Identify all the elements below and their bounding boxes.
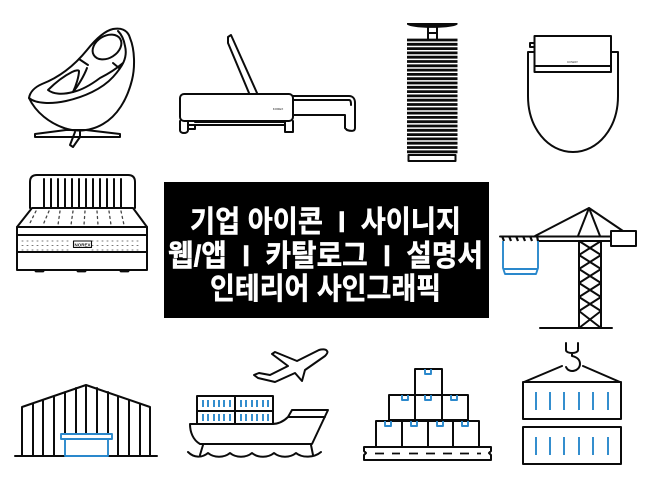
icon: cargo ship	[188, 396, 328, 457]
icon: shipping containers on hook	[523, 343, 621, 464]
icon: lounge bed	[180, 35, 355, 133]
icon: egg chair	[29, 29, 134, 147]
cargo load in blue	[503, 241, 538, 274]
heading line 3: 인테리어 사인그래픽	[210, 273, 441, 306]
container stripes in blue	[203, 400, 268, 421]
warehouse door in blue	[61, 434, 112, 456]
text: brand label on bed: KOREX	[273, 107, 283, 111]
container stripes in blue	[536, 392, 608, 455]
box tags in blue	[385, 369, 468, 426]
text: brand label on mattress: NOREX	[74, 242, 91, 247]
stitching on mattress side	[22, 241, 142, 250]
stitching on mattress top	[29, 211, 124, 225]
heading line 1: 기업 아이콘 I 사이니지	[190, 206, 461, 239]
icon: tower crane	[500, 208, 636, 328]
icon: airplane	[254, 349, 327, 382]
heading line 2: 웹/앱 I 카탈로그 I 설명서	[168, 240, 483, 273]
text: brand label on bidet: COWAY	[567, 60, 578, 64]
panel: black title box	[164, 182, 489, 318]
icon: bidet toilet seat	[528, 36, 618, 152]
icon: warehouse	[15, 385, 157, 456]
icon: mattress and bed	[17, 175, 147, 271]
icon: stacked boxes on pallet	[364, 369, 491, 460]
icon: tower air purifier	[407, 23, 458, 161]
